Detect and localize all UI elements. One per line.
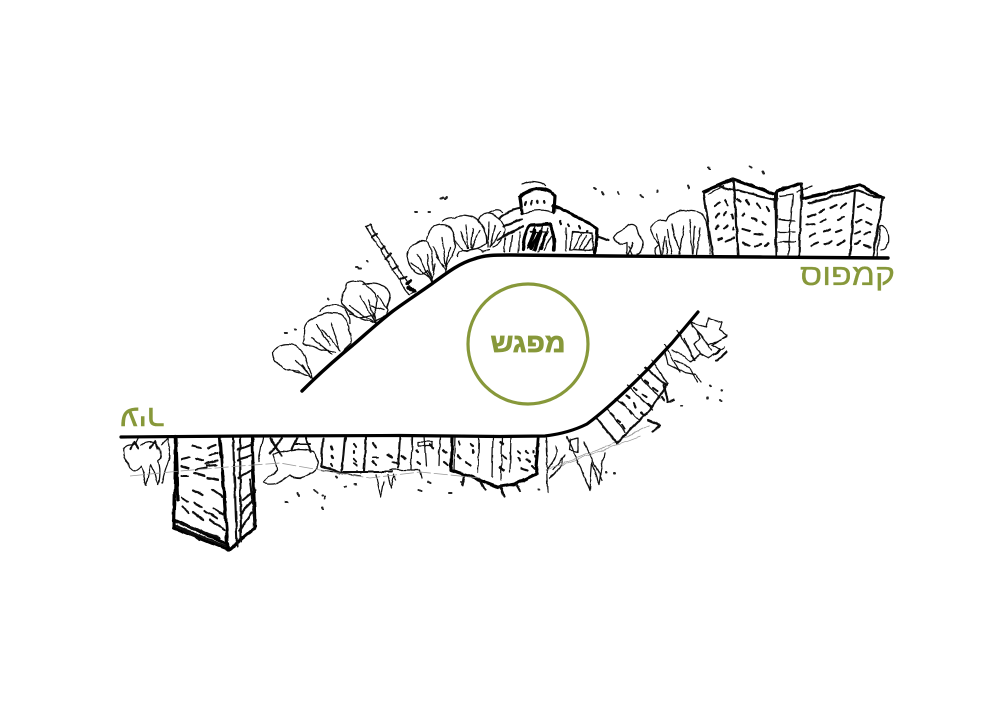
city slope buildings	[596, 330, 695, 443]
campus dome building	[497, 182, 609, 253]
city right sketches	[546, 425, 650, 492]
city ground line	[121, 312, 698, 437]
right trees	[613, 210, 710, 255]
label: campus: קמפוס	[800, 259, 895, 292]
icon: slanted chimney tower	[366, 225, 414, 295]
campus large building	[703, 179, 888, 257]
birds and leaves above the hill	[285, 167, 764, 333]
campus ground line	[302, 255, 888, 391]
label: city, upside down: עיר	[120, 401, 164, 434]
thin street line under the city	[130, 463, 480, 478]
city small buildings along the street	[321, 436, 455, 478]
city right trees	[665, 318, 727, 382]
upper hillside trees	[273, 210, 505, 380]
meeting circle	[468, 284, 588, 404]
city stepped buildings	[451, 436, 539, 496]
leaves below the city	[285, 385, 723, 509]
city middle trees	[258, 437, 396, 497]
city left trees	[124, 438, 170, 485]
city large hanging building	[174, 437, 255, 550]
label: meeting: מפגש	[490, 328, 566, 358]
